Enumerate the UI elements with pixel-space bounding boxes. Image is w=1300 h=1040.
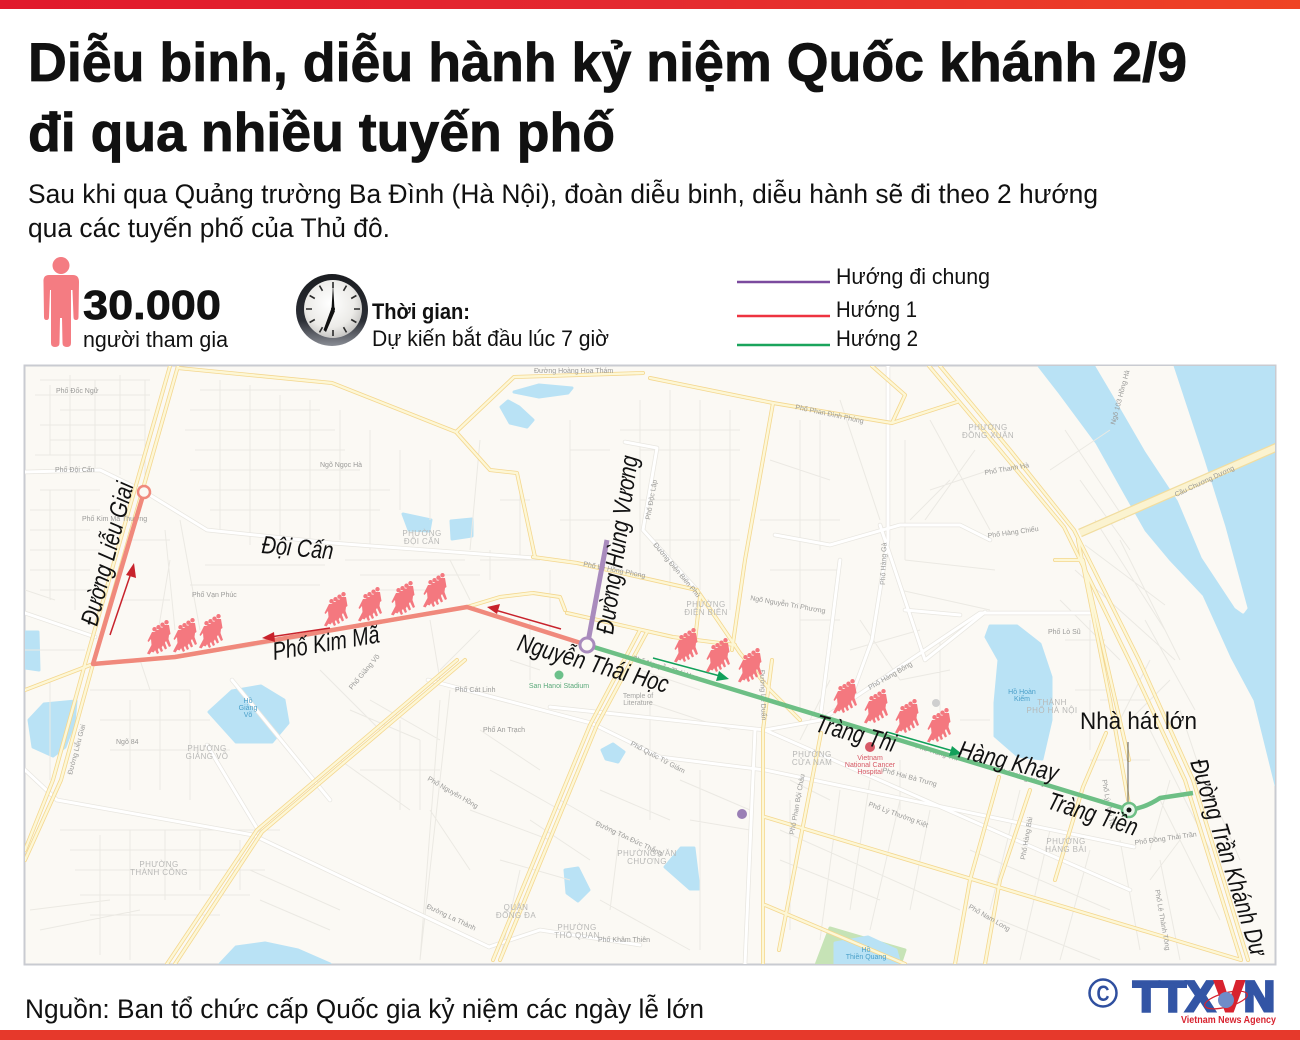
map: points of interest: Literature: [623, 700, 653, 707]
icons: marching soldiers, Kim Mã east: [324, 573, 447, 626]
logo: copyright and TTXVN: [1090, 973, 1276, 1026]
map: district labels: PHƯỜNG: [686, 600, 726, 609]
map: district labels: PHƯỜNG: [187, 744, 227, 753]
map: district labels: PHƯỜNG: [792, 750, 832, 759]
map: district labels: PHƯỜNG: [557, 923, 597, 932]
map: water and parks: [25, 366, 1276, 965]
map: district labels: [130, 423, 1087, 940]
map: district labels: ĐỘI CẤN: [404, 536, 440, 546]
map: points of interest: Giảng: [239, 705, 257, 712]
street label: Đường Hùng Vương: Đường Hùng Vương: [591, 454, 644, 636]
map: small street labels: Ngõ Ngọc Hà: [320, 462, 362, 469]
logo: copyright and TTXVN: Vietnam News Agency: [1181, 1015, 1276, 1026]
map: district labels: PHƯỜNG: [968, 423, 1008, 432]
map: small street labels: Phố Hàng Gà: [878, 542, 888, 585]
map: small street labels: Phố Tràng Thi: [914, 741, 959, 763]
map: small street labels: Phố Phan Đình Phùng: [795, 402, 865, 425]
map: small street labels: Phố Lý Thái Tổ: [1100, 779, 1117, 827]
arrow: green 1: [653, 658, 729, 681]
map: small street labels: Phố Nguyễn Thái Học: [631, 653, 700, 682]
map: points of interest: Hồ: [862, 945, 871, 954]
map: small street labels: Phố Nguyên Hồng: [426, 774, 480, 810]
street label: Tràng Tiền: Tràng Tiền: [1044, 787, 1141, 842]
map: small street labels: Đường Lê Duẩn: [758, 670, 768, 721]
map: small street labels: Phố Lý Thường Kiệt: [867, 799, 930, 829]
map: small street labels: Phố Hàng Khay: [997, 765, 1047, 788]
bottom red bar: [0, 1030, 1300, 1040]
source: Nguồn: Ban tổ chức cấp Quốc gia kỷ niệm các ngày lễ lớn: [25, 993, 704, 1024]
icons: marching soldiers, Nguyễn Thái Học: [674, 628, 762, 682]
map: small street labels: Phố Hàng Chiếu: [987, 524, 1039, 540]
map: district labels: THỔ QUAN: [554, 931, 600, 940]
map: small street labels: Phố Nam Long: [967, 902, 1012, 933]
street label: Đội Cấn: Đội Cấn: [260, 531, 335, 565]
icon: person: [43, 257, 79, 347]
street label: Đường Trần Khánh Dư: Đường Trần Khánh Dư: [1184, 755, 1273, 961]
map: small street labels: Phố Hai Bà Trưng: [881, 765, 938, 788]
map: district labels: PHỐ HÀ NỘI: [1026, 705, 1078, 715]
stat: time: [372, 299, 609, 351]
street label: Phố Kim Mã: Phố Kim Mã: [270, 620, 382, 666]
map: white roads: [25, 366, 1134, 964]
street label: Tràng Thi: Tràng Thi: [812, 710, 900, 758]
map: yellow main roads: [25, 366, 1248, 964]
map: points of interest: Kiếm: [1014, 694, 1030, 703]
map: points of interest: Temple of: [623, 693, 653, 700]
map: points of interest: Hồ: [244, 696, 253, 705]
map: district labels: THÀNH CÔNG: [130, 868, 188, 877]
street label: Hàng Khay: Hàng Khay: [956, 736, 1062, 788]
icons: marching soldiers, Tràng Thi: [833, 679, 951, 742]
map: points of interest: Thiền Quang: [846, 952, 886, 961]
map: district labels: ĐỒNG XUÂN: [962, 430, 1014, 440]
map: small street labels: Đường Liễu Giai: [65, 723, 87, 776]
icons: marching soldiers, Kim Mã west: [147, 614, 223, 654]
stat: participants: [83, 282, 229, 352]
legend: Hướng 1: [836, 297, 917, 322]
map: small street labels: Phố Kim Mã Thượng: [82, 514, 147, 523]
map: district labels: PHƯỜNG VĂN: [617, 849, 677, 858]
title: [28, 31, 1187, 163]
map: small street labels: Phố Cát Linh: [455, 685, 496, 694]
map: small street labels: Phố Giảng Võ: [347, 652, 382, 691]
map: district labels: CỬA NAM: [792, 758, 832, 767]
map: points of interest: [239, 670, 1036, 961]
map: points of interest: National Cancer: [845, 762, 896, 769]
map: small street labels: Phố Đội Cấn: [55, 465, 95, 474]
map: points of interest: Võ: [244, 712, 252, 719]
map: small street labels: Đường La Thành: [425, 903, 477, 932]
route: direction 2 (green): [587, 645, 1193, 810]
map: district labels: ĐỐNG ĐA: [496, 910, 536, 920]
legend: Hướng đi chung: [836, 264, 990, 289]
map: small street labels: Phố Vạn Phúc: [192, 590, 237, 599]
subtitle: Sau khi qua Quảng trường Ba Đình (Hà Nội), đoàn diễu binh, diễu hành sẽ đi theo 2 hướng: [28, 178, 1098, 209]
logo: copyright and TTXVN: TTXVN: [1133, 973, 1275, 1021]
map: small street labels: Phố Lê Hồng Phong: [583, 559, 646, 580]
map: district labels: PHƯỜNG: [402, 529, 442, 538]
map: district labels: HÀNG BÀI: [1045, 845, 1087, 854]
map: district labels: PHƯỜNG: [139, 860, 179, 869]
marker: Ba Đình junction: [580, 638, 594, 652]
map: small street labels: Phố Đồng Thái Trần: [1134, 829, 1197, 847]
map: minor alleys: [25, 375, 1240, 960]
map: points of interest: San Hanoi Stadium: [529, 683, 589, 690]
map: small street labels: Cầu Chương Dương: [1173, 463, 1236, 499]
map: small street labels: [55, 368, 1236, 951]
label: Nhà hát lớn: Nhà hát lớn: [1080, 708, 1197, 735]
map: small street labels: Phố Đốc Ngữ: [56, 386, 99, 395]
map: small street labels: Đường Tôn Đức Thắng: [594, 819, 664, 858]
map: small street labels: Ngõ Nguyễn Tri Phương: [750, 593, 826, 615]
arrow: red 2: [262, 628, 330, 642]
map: points of interest: Hospital: [857, 769, 883, 776]
stat: time: Dự kiến bắt đầu lúc 7 giờ: [372, 326, 609, 351]
map: small street labels: Phố An Trạch: [483, 725, 525, 734]
legend: [737, 264, 990, 351]
map: small street labels: Đường Hoàng Hoa Thám: [534, 368, 613, 375]
map: small street labels: Phố Lò Sũ: [1048, 627, 1081, 636]
map: district labels: ĐIỆN BIÊN: [684, 608, 728, 617]
map: district labels: PHƯỜNG: [1046, 837, 1086, 846]
map: small street labels: Ngõ 103 Hồng Hà: [1108, 369, 1131, 426]
map: points of interest: Vietnam: [857, 755, 883, 762]
title: đi qua nhiều tuyến phố: [28, 101, 615, 163]
map: district labels: QUẬN: [504, 903, 528, 912]
marker: Nhà hát lớn: [1122, 742, 1136, 817]
map: points of interest: Hồ Hoàn: [1008, 687, 1036, 696]
marker: start of red route: [138, 486, 150, 498]
top red bar: [0, 0, 1300, 9]
map: small street labels: Phố Quốc Tử Giám: [629, 739, 687, 775]
map: district labels: CHƯƠNG: [627, 857, 667, 866]
arrow: red 3: [110, 563, 136, 635]
map: small street labels: Phố Phan Bội Châu: [787, 773, 807, 835]
subtitle: [28, 178, 1098, 243]
panel: map: [24, 366, 1277, 965]
street label: Đường Liễu Giai: Đường Liễu Giai: [75, 478, 140, 629]
map: small street labels: Phố Hàng Bài: [1018, 816, 1035, 860]
map: Chương Dương bridge: [1080, 447, 1277, 533]
street label: Nguyễn Thái Học: Nguyễn Thái Học: [514, 628, 673, 699]
arrow: red 1: [487, 604, 561, 629]
stat: participants: 30.000: [83, 282, 221, 328]
logo: copyright and TTXVN: C: [1096, 981, 1110, 1006]
map: district labels: GIẢNG VÕ: [186, 752, 228, 761]
map: small street labels: Phố Hàng Bông: [866, 659, 914, 692]
subtitle: qua các tuyến phố của Thủ đô.: [28, 213, 390, 243]
map: small street labels: Phố Lê Thánh Tông: [1153, 889, 1173, 951]
stat: participants: người tham gia: [83, 327, 229, 352]
legend: Hướng 2: [836, 326, 918, 351]
map: small street labels: Phố Độc Lập: [643, 479, 659, 520]
map: small street labels: Phố Thanh Hà: [984, 460, 1030, 477]
arrow: green 2: [887, 732, 962, 756]
map: small street labels: Đường Điện Biên Phủ: [651, 541, 702, 599]
map: district labels: THÀNH: [1037, 698, 1067, 707]
route: direction 1 (red): [93, 492, 587, 664]
map: small street labels: Ngõ 84: [116, 739, 139, 746]
stat: time: Thời gian:: [372, 299, 470, 324]
map: small street labels: Phố Khâm Thiên: [598, 935, 650, 944]
icon: clock: [296, 274, 368, 346]
title: Diễu binh, diễu hành kỷ niệm Quốc khánh 2/9: [28, 31, 1187, 93]
route: common direction (purple): [588, 540, 607, 642]
